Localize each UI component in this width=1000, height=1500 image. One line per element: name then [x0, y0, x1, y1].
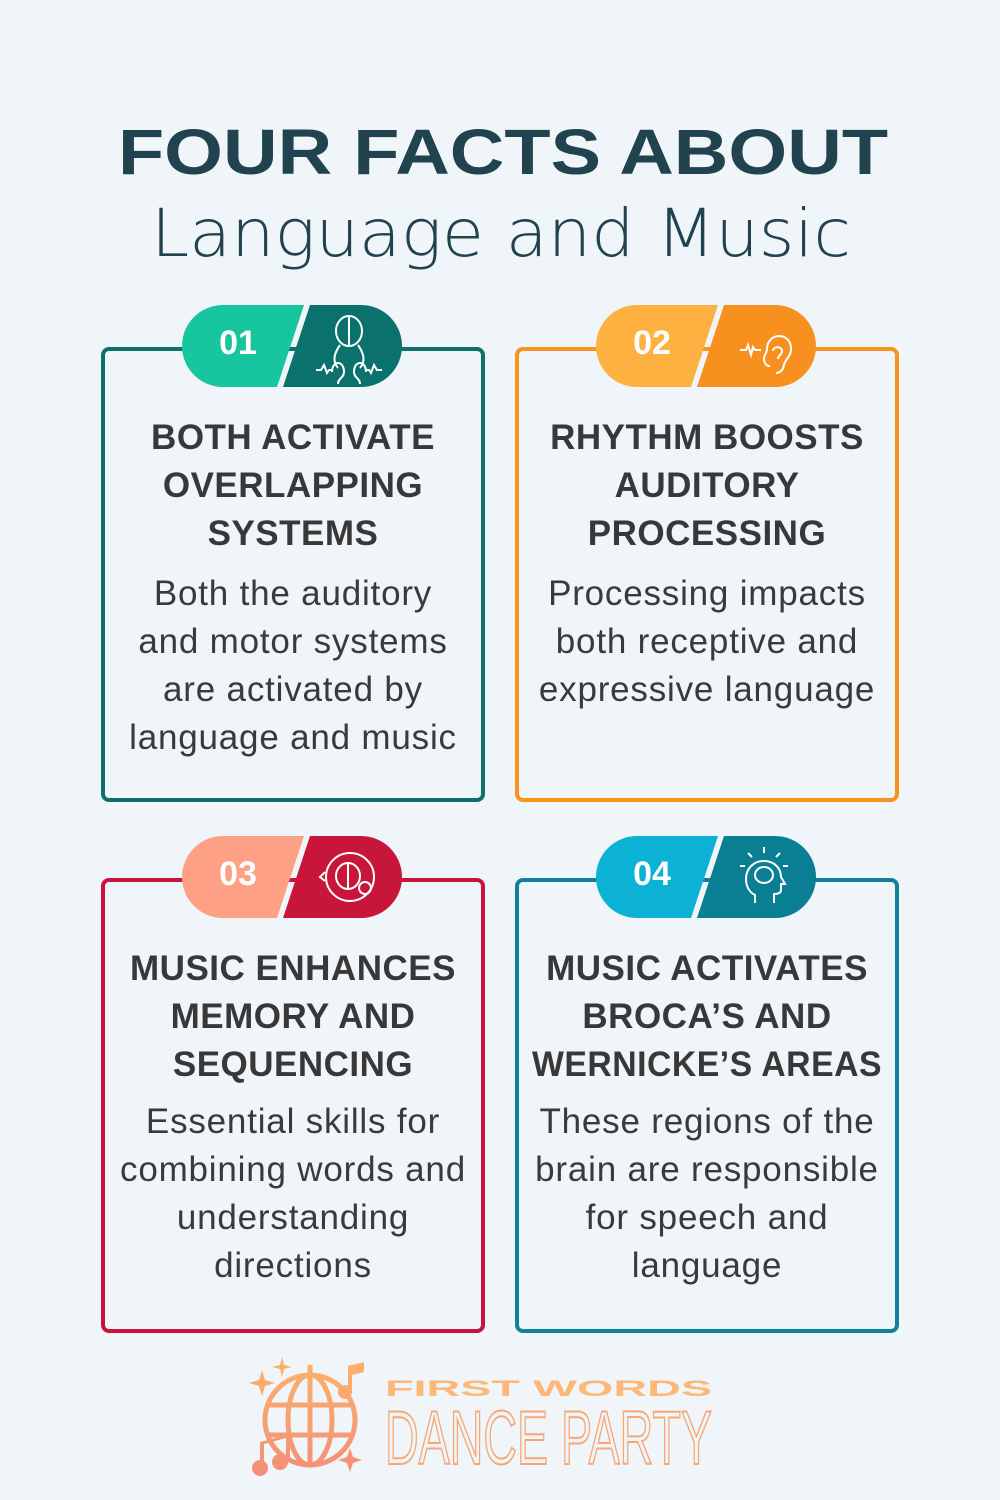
badge 04 — [596, 836, 816, 918]
panel: fact 3: understanding — [177, 1198, 409, 1237]
badge 02 — [596, 305, 816, 387]
title: Language and Music — [151, 195, 851, 272]
panel: fact 4: for speech and — [586, 1198, 828, 1237]
logo: FIRST WORDS — [385, 1376, 712, 1401]
panel: fact 4: language — [632, 1246, 782, 1285]
panel: fact 3: MUSIC ENHANCES — [130, 949, 456, 988]
panel: fact 4: brain are responsible — [535, 1150, 879, 1189]
panel: fact 4: MUSIC ACTIVATES — [546, 949, 868, 988]
panel: fact 2: RHYTHM BOOSTS — [550, 418, 864, 457]
panel: fact 2 — [517, 305, 897, 800]
badge 01 — [182, 305, 402, 387]
panel: fact 1 — [103, 305, 483, 800]
panel: fact 3: MEMORY AND — [171, 997, 415, 1036]
panel: fact 1: are activated by — [163, 670, 423, 709]
panel: fact 1: BOTH ACTIVATE — [151, 418, 435, 457]
panel: fact 1: language and music — [129, 718, 457, 757]
panel: fact 2: expressive language — [539, 670, 875, 709]
panel: fact 3: SEQUENCING — [173, 1045, 413, 1084]
panel: fact 2: both receptive and — [556, 622, 858, 661]
badge 04: 04 — [633, 855, 671, 893]
panel: fact 4: These regions of the — [539, 1102, 875, 1141]
badge 03: 03 — [219, 855, 257, 893]
panel: fact 2: AUDITORY — [615, 466, 799, 505]
panel: fact 1: SYSTEMS — [208, 514, 378, 553]
panel: fact 1: and motor systems — [138, 622, 448, 661]
icon: disco globe — [265, 1365, 355, 1465]
badge 03 — [182, 836, 402, 918]
title — [118, 116, 888, 272]
panel: fact 4: WERNICKE’S AREAS — [532, 1045, 882, 1084]
panel: fact 2: PROCESSING — [588, 514, 826, 553]
panel: fact 3 — [103, 836, 483, 1331]
panel: fact 4: BROCA’S AND — [582, 997, 832, 1036]
panel: fact 4 — [517, 836, 897, 1331]
panel: fact 2: Processing impacts — [548, 574, 866, 613]
panel: fact 3: Essential skills for — [146, 1102, 440, 1141]
panel: fact 1: OVERLAPPING — [163, 466, 423, 505]
panel: fact 1: Both the auditory — [154, 574, 432, 613]
panel: fact 3: combining words and — [120, 1150, 466, 1189]
logo: DANCE PARTY — [385, 1396, 712, 1481]
panel: fact 3: directions — [214, 1246, 372, 1285]
title: FOUR FACTS ABOUT — [118, 116, 888, 188]
logo — [249, 1357, 712, 1481]
badge 02: 02 — [633, 324, 671, 362]
badge 01: 01 — [219, 324, 257, 362]
